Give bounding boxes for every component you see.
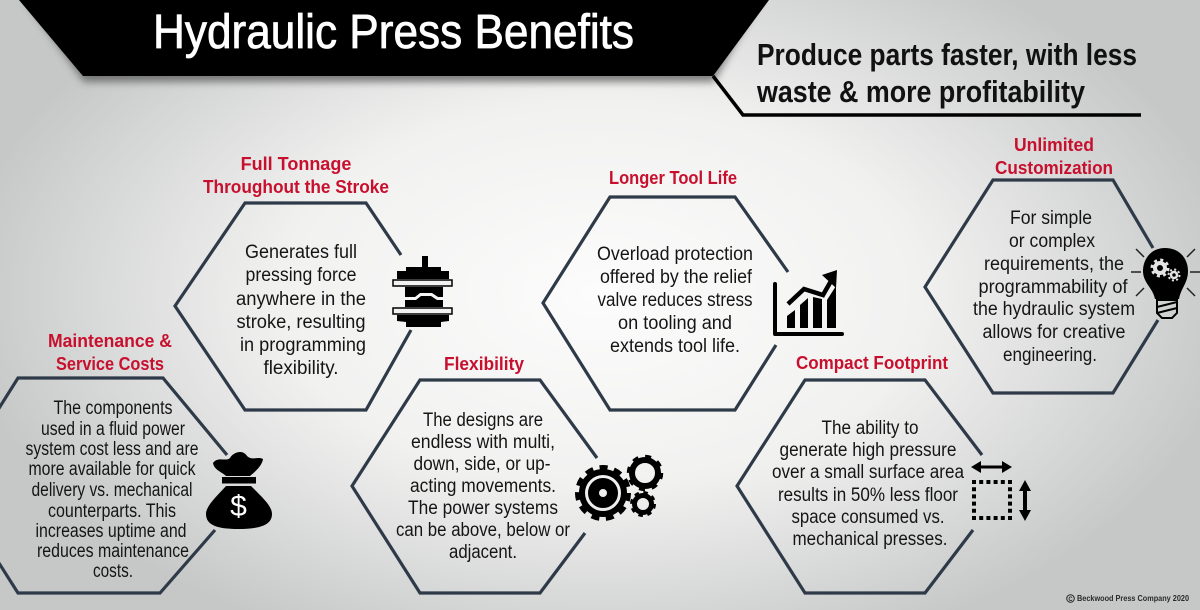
text: unlimited customization: the hydraulic system <box>973 299 1135 320</box>
heading: flexibility: Flexibility <box>444 354 524 374</box>
text: flexibility: can be above, below or <box>396 520 571 541</box>
text: maintenance: delivery vs. mechanical <box>32 480 192 501</box>
text: maintenance: increases uptime and <box>36 521 186 542</box>
text: longer tool life: valve reduces stress <box>598 290 752 311</box>
text: maintenance: counterparts. This <box>48 501 176 522</box>
icon: growth chart <box>775 270 842 334</box>
heading: maintenance: Service Costs <box>56 354 164 374</box>
text: flexibility <box>396 410 571 563</box>
text: maintenance: system cost less and are <box>26 439 198 460</box>
text: unlimited customization: requirements, the <box>984 254 1124 275</box>
heading: unlimited customization: Customization <box>995 158 1113 178</box>
heading: full tonnage: Full Tonnage <box>241 154 351 174</box>
text: longer tool life: extends tool life. <box>610 336 740 357</box>
panel: unlimited customization <box>925 135 1200 393</box>
text: maintenance: costs. <box>93 561 133 582</box>
text: flexibility: down, side, or up- <box>414 454 550 475</box>
icon: gears <box>578 456 662 518</box>
title: Hydraulic Press Benefits <box>153 6 634 59</box>
subtitle block: Produce parts faster, with less <box>757 37 1137 72</box>
text: compact footprint: results in 50% less floor <box>778 485 959 506</box>
panel: maintenance <box>0 331 272 593</box>
copyright: C <box>1068 597 1073 603</box>
text: full tonnage <box>236 242 366 379</box>
icon: money bag: $ <box>230 490 247 523</box>
heading: maintenance <box>48 331 172 374</box>
text: maintenance: reduces maintenance <box>37 541 189 562</box>
panel: full tonnage <box>175 154 452 410</box>
text: maintenance: more available for quick <box>28 459 196 480</box>
text: maintenance <box>26 398 198 582</box>
text: unlimited customization: For simple <box>1010 208 1092 229</box>
text: full tonnage: pressing force <box>246 265 356 286</box>
panel: flexibility <box>352 354 662 593</box>
text: compact footprint: space consumed vs. <box>792 507 944 528</box>
text: full tonnage: flexibility. <box>264 358 338 379</box>
text: unlimited customization: or complex <box>1009 231 1095 252</box>
icon: footprint <box>971 461 1031 521</box>
text: flexibility: The power systems <box>408 498 558 519</box>
text: flexibility: acting movements. <box>410 476 556 497</box>
text: compact footprint: generate high pressure <box>780 440 956 461</box>
panel: compact footprint <box>737 353 1031 593</box>
text: flexibility: adjacent. <box>449 542 517 563</box>
icon: press <box>393 256 452 327</box>
panel: longer tool life <box>543 168 842 410</box>
icon: light bulb <box>1131 248 1200 318</box>
text: flexibility: endless with multi, <box>411 432 555 453</box>
heading: unlimited customization <box>995 135 1113 178</box>
text: unlimited customization: programmability of <box>978 277 1128 298</box>
text: longer tool life <box>597 244 753 357</box>
copyright: Beckwood Press Company 2020 <box>1077 594 1190 603</box>
text: full tonnage: in programming <box>240 335 366 356</box>
text: flexibility: The designs are <box>423 410 543 431</box>
heading: unlimited customization: Unlimited <box>1014 135 1094 155</box>
text: full tonnage: anywhere in the <box>236 289 366 310</box>
text: longer tool life: Overload protection <box>597 244 753 265</box>
text: unlimited customization: engineering. <box>1003 345 1097 366</box>
heading: full tonnage: Throughout the Stroke <box>203 177 389 197</box>
heading: longer tool life: Longer Tool Life <box>609 168 737 188</box>
subtitle block: waste & more profitability <box>756 74 1086 109</box>
title banner <box>19 0 769 82</box>
subtitle block <box>713 37 1141 115</box>
heading: full tonnage <box>203 154 389 197</box>
text: compact footprint: over a small surface area <box>772 462 964 483</box>
icon: money bag <box>206 452 272 529</box>
text: unlimited customization: allows for creative <box>982 322 1126 343</box>
text: longer tool life: offered by the relief <box>600 267 753 288</box>
text: unlimited customization <box>973 208 1135 366</box>
text: longer tool life: on tooling and <box>618 313 732 334</box>
text: compact footprint <box>772 418 964 550</box>
text: compact footprint: mechanical presses. <box>792 529 948 550</box>
heading: maintenance: Maintenance & <box>48 331 172 351</box>
text: compact footprint: The ability to <box>822 418 918 439</box>
text: full tonnage: stroke, resulting <box>236 312 366 333</box>
text: full tonnage: Generates full <box>245 242 357 263</box>
heading: compact footprint: Compact Footprint <box>796 353 948 373</box>
text: maintenance: The components <box>54 398 172 419</box>
text: maintenance: used in a fluid power <box>41 419 186 440</box>
